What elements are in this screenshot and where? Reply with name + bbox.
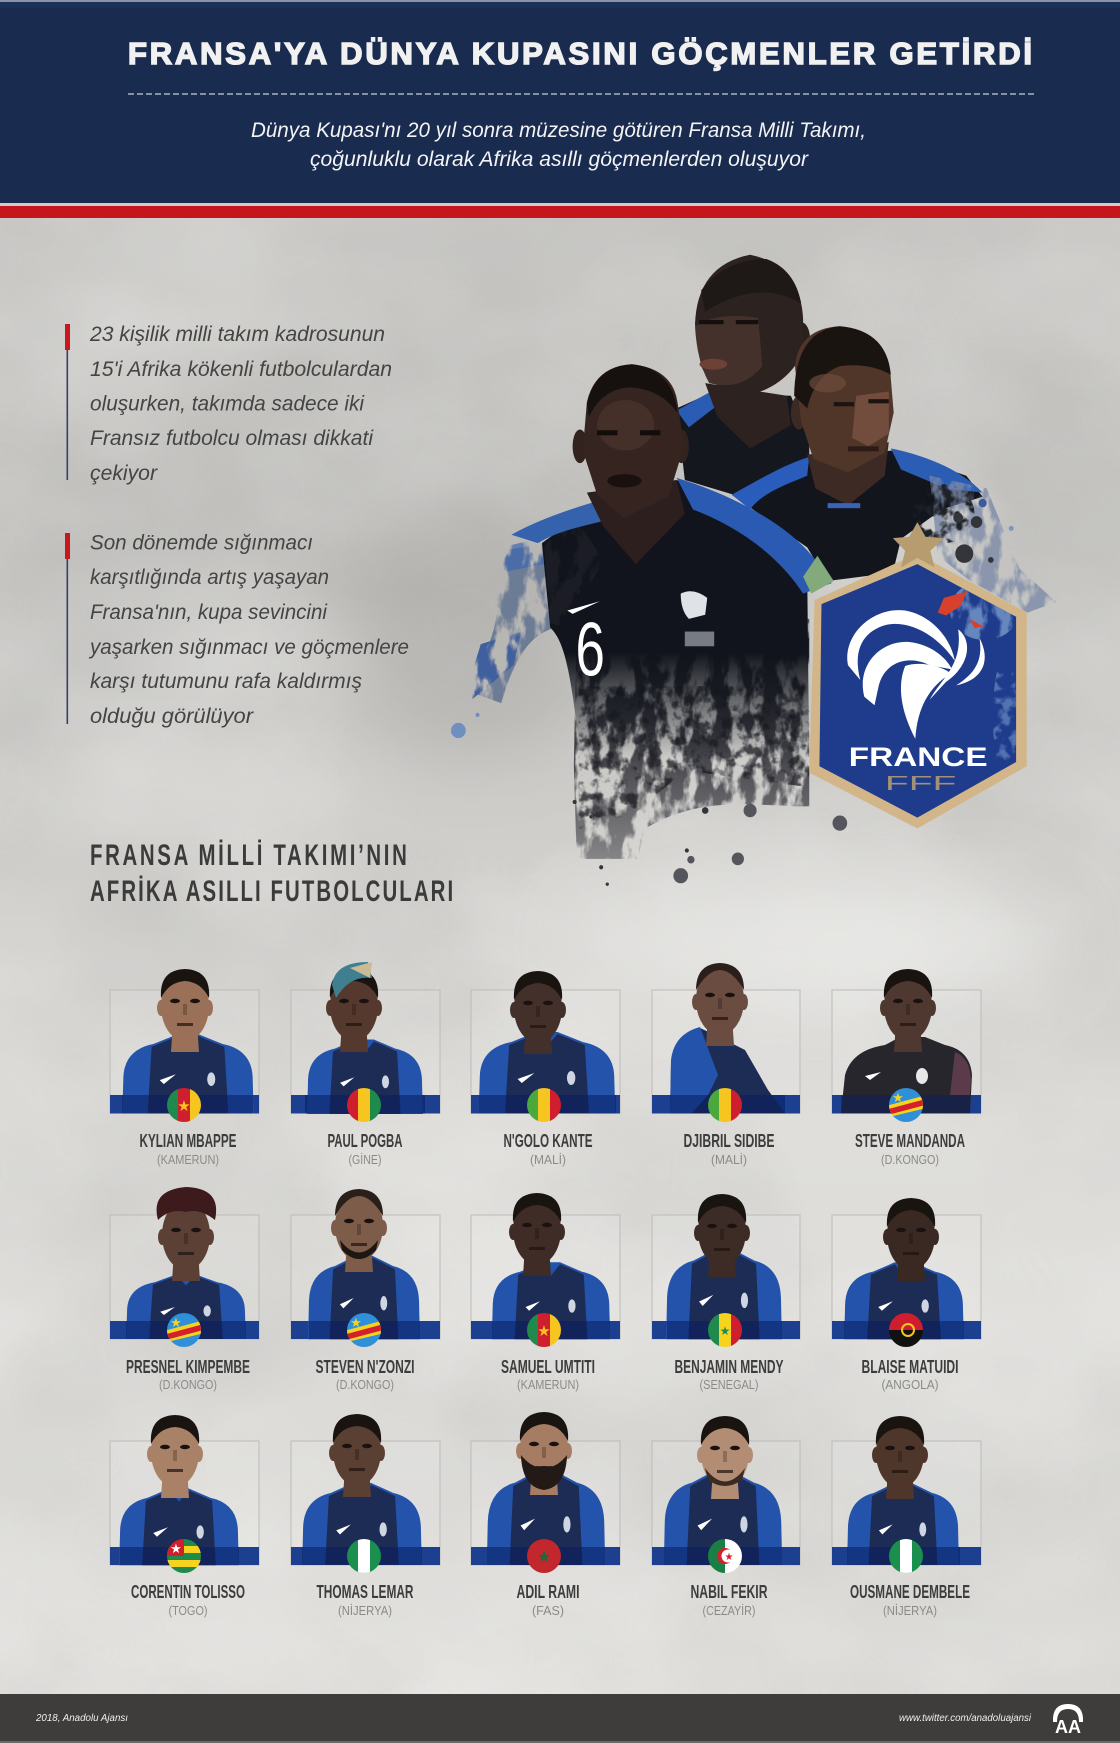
player card: Paul Pogba	[291, 962, 440, 1167]
header band	[0, 0, 1120, 218]
flag: Mali	[527, 1088, 561, 1122]
title: FRANSA'YA DÜNYA KUPASINI GÖÇMENLER GETİRDİ	[128, 36, 1032, 71]
player card: Djibril Sidibe	[652, 963, 800, 1167]
player card: Benjamin Mendy	[652, 1194, 800, 1392]
player card: N'Golo Kante: (MALİ)	[530, 1152, 566, 1167]
player: Pogba head	[573, 364, 689, 564]
player card: Blaise Matuidi: BLAISE MATUIDI	[862, 1357, 958, 1377]
player: Kante	[677, 255, 810, 495]
icon: AA logo	[1053, 1704, 1083, 1737]
flag: Morocco	[527, 1539, 561, 1573]
flag: Nigeria	[347, 1539, 381, 1573]
flag: Algeria	[708, 1539, 742, 1573]
flag: Senegal	[708, 1313, 742, 1347]
flag: Morocco: ★	[537, 1549, 551, 1566]
flag: Angola	[889, 1313, 923, 1347]
player card: Adil Rami	[471, 1412, 620, 1618]
player card: Paul Pogba: PAUL POGBA	[328, 1131, 402, 1151]
flag: Guinea	[347, 1088, 381, 1122]
flag: DR Congo	[347, 1313, 381, 1347]
flag: Cameroon: ★	[177, 1098, 191, 1115]
section heading: AFRİKA ASILLI FUTBOLCULARI	[90, 875, 453, 908]
player card: Corentin Tolisso	[110, 1415, 259, 1618]
player card: Benjamin Mendy: BENJAMIN MENDY	[674, 1357, 784, 1377]
player: Mbappe	[732, 326, 983, 581]
flag: DR Congo: ★	[170, 1315, 182, 1330]
logo: France FFF crest	[809, 522, 1027, 829]
player card: Samuel Umtiti	[471, 1193, 620, 1392]
text block: refugee paragraph: karşıtlığında artış yaşayan	[90, 566, 329, 589]
player card: Steve Mandanda: STEVE MANDANDA	[855, 1131, 965, 1151]
logo: France FFF crest: FRANCE	[849, 742, 988, 772]
player card: Paul Pogba: (GİNE)	[348, 1152, 382, 1167]
player card: Steve Mandanda	[832, 969, 981, 1167]
player card: Steven N'Zonzi	[291, 1189, 440, 1392]
text block: squad paragraph	[65, 323, 392, 485]
subtitle	[251, 119, 866, 171]
player card: N'Golo Kante: N'GOLO KANTE	[504, 1131, 592, 1151]
text block: squad paragraph: 15'i Afrika kökenli futbolculardan	[90, 358, 392, 381]
player card: Steve Mandanda: (D.KONGO)	[881, 1152, 939, 1167]
text block: squad paragraph: Fransız futbolcu olması dikkati	[90, 427, 374, 450]
player card: Adil Rami: (FAS)	[532, 1603, 564, 1618]
footer bar	[0, 1694, 1120, 1743]
player card: Nabil Fekir: (CEZAYİR)	[702, 1603, 756, 1618]
player card: Djibril Sidibe: (MALİ)	[711, 1152, 747, 1167]
hero: three players illustration	[451, 255, 1056, 886]
flag: DR Congo	[167, 1313, 201, 1347]
player card: Ousmane Dembele: OUSMANE DEMBELE	[850, 1582, 970, 1602]
section heading	[90, 839, 453, 908]
text block: refugee paragraph: yaşarken sığınmacı ve göçmenlere	[88, 636, 409, 659]
flag: DR Congo: ★	[350, 1315, 362, 1330]
flag: Togo	[167, 1539, 201, 1573]
player card: Corentin Tolisso: CORENTIN TOLISSO	[131, 1582, 245, 1602]
flag: Nigeria	[889, 1539, 923, 1573]
player card: Kylian Mbappe: KYLIAN MBAPPE	[140, 1131, 236, 1151]
player card: Benjamin Mendy: (SENEGAL)	[700, 1377, 758, 1392]
text block: squad paragraph: 23 kişilik milli takım kadrosunun	[89, 323, 385, 346]
player: Pogba body: 6	[575, 606, 605, 692]
flag: Algeria: ★	[725, 1552, 734, 1563]
flag: DR Congo	[889, 1088, 923, 1122]
logo: France FFF crest: FFF	[885, 773, 956, 795]
flag: DR Congo: ★	[892, 1090, 904, 1105]
player card: Blaise Matuidi: (ANGOLA)	[882, 1377, 938, 1392]
icon: AA logo: AA	[1055, 1717, 1081, 1737]
player card: Presnel Kimpembe: (D.KONGO)	[159, 1377, 217, 1392]
player card: Nabil Fekir: NABIL FEKIR	[690, 1582, 768, 1602]
text block: refugee paragraph: Fransa'nın, kupa sevincini	[90, 601, 328, 624]
subtitle: Dünya Kupası'nı 20 yıl sonra müzesine götüren Fransa Milli Takımı,	[251, 119, 866, 142]
player: Pogba body	[467, 478, 834, 859]
player card: Steven N'Zonzi: (D.KONGO)	[336, 1377, 394, 1392]
section heading: FRANSA MİLLİ TAKIMI’NIN	[90, 839, 407, 872]
player card: N'Golo Kante	[471, 971, 620, 1167]
player card: Kylian Mbappe	[110, 969, 259, 1167]
text block: squad paragraph: oluşurken, takımda sadece iki	[90, 392, 365, 416]
text block: refugee paragraph: olduğu görülüyor	[90, 705, 254, 728]
player card: Steven N'Zonzi: STEVEN N'ZONZI	[316, 1357, 414, 1377]
player card: Adil Rami: ADIL RAMI	[516, 1582, 580, 1602]
footer bar: www.twitter.com/anadoluajansi	[899, 1713, 1032, 1724]
subtitle: çoğunluklu olarak Afrika asıllı göçmenlerden oluşuyor	[310, 148, 809, 171]
flag: Cameroon: ★	[537, 1323, 551, 1340]
player card: Ousmane Dembele: (NİJERYA)	[883, 1603, 937, 1618]
player card: Corentin Tolisso: (TOGO)	[168, 1603, 208, 1618]
player card: Thomas Lemar: THOMAS LEMAR	[316, 1582, 414, 1602]
logo rooster	[847, 610, 985, 739]
player card: Blaise Matuidi	[832, 1198, 981, 1392]
flag: Cameroon	[527, 1313, 561, 1347]
flag: Mali	[708, 1088, 742, 1122]
text block: refugee paragraph: Son dönemde sığınmacı	[90, 532, 313, 554]
player card: Djibril Sidibe: DJIBRIL SIDIBE	[684, 1131, 774, 1151]
text block: refugee paragraph: karşı tutumunu rafa kaldırmış	[90, 670, 362, 693]
text block: refugee paragraph	[65, 532, 409, 728]
text block: squad paragraph: çekiyor	[90, 462, 158, 485]
player card: Kylian Mbappe: (KAMERUN)	[157, 1152, 219, 1167]
footer bar: 2018, Anadolu Ajansı	[35, 1713, 128, 1724]
player card: Thomas Lemar: (NİJERYA)	[338, 1603, 392, 1618]
player card: Samuel Umtiti: (KAMERUN)	[517, 1377, 579, 1392]
splash: right of Mbappe	[913, 476, 1056, 613]
player card: Presnel Kimpembe: PRESNEL KIMPEMBE	[126, 1357, 250, 1377]
player card: Presnel Kimpembe	[110, 1187, 259, 1392]
flag: Senegal: ★	[720, 1324, 730, 1338]
player card: Samuel Umtiti: SAMUEL UMTITI	[501, 1357, 595, 1377]
flag: Togo: ★	[170, 1541, 182, 1556]
player card: Nabil Fekir	[652, 1416, 800, 1618]
player card: Ousmane Dembele	[832, 1416, 981, 1618]
paint splatters	[451, 499, 1014, 886]
flag: Cameroon	[167, 1088, 201, 1122]
player card: Thomas Lemar	[291, 1414, 440, 1618]
